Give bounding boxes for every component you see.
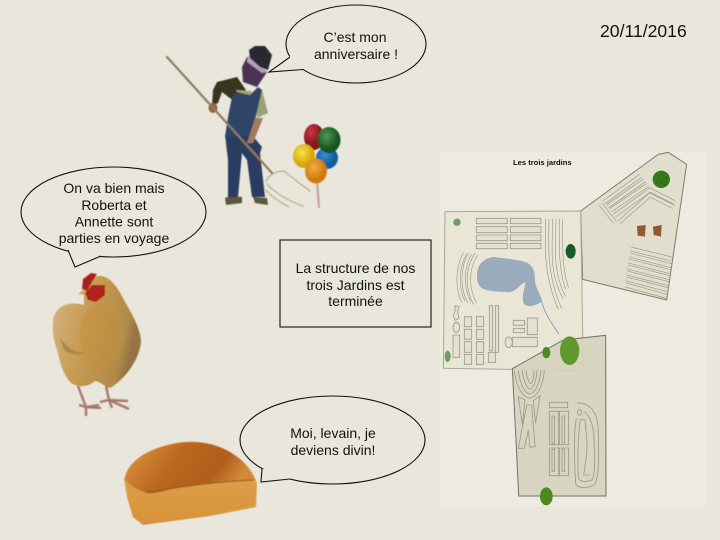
overalls bib [225,87,262,137]
bubble ellipse [240,396,425,484]
hen legs [78,386,129,416]
bubble text: C’est mon [323,29,387,45]
bubble tail fill [261,469,295,482]
orange balloon [305,158,327,184]
hand [208,103,218,113]
angled beds [601,176,674,222]
curved beds [459,219,567,309]
fork handle [167,57,272,173]
light sleeve [255,90,268,118]
bubble tail outline [269,57,303,72]
small trees [445,219,576,362]
hen comb [82,273,97,291]
rectangular beds [549,402,569,476]
date: 20/11/2016 [600,21,687,41]
hen beak [78,289,85,295]
garden panel north-east [581,152,687,300]
forearm [247,118,263,143]
green balloon [318,127,340,153]
garden plan [439,151,706,507]
hen breast [80,303,124,367]
balloons [293,124,340,208]
speech bubble: bread [240,396,425,484]
bubble text: parties en voyage [59,230,169,246]
box text: trois Jardins est [306,277,405,293]
trousers [225,135,265,197]
tree with red fruit [653,171,670,188]
bubble tail fill [269,56,312,72]
hen wing [60,338,86,354]
bubble tail fill [68,245,101,267]
bubble text: Annette sont [75,214,153,230]
yellow balloon [293,144,315,168]
bubble text: On va bien mais [63,180,165,196]
box frame [280,240,431,327]
bubble text: deviens divin! [291,442,375,458]
rectangular beds [453,218,541,364]
speech bubble: farmer [269,5,426,83]
bubble ellipse [21,167,206,257]
panel shape [581,152,687,300]
plan background [439,151,706,507]
box text: terminée [328,293,383,309]
bubble text: anniversaire ! [314,46,398,62]
panel shape [512,335,606,496]
panel shape [443,211,583,371]
hat [249,46,272,70]
balloon string [317,180,319,208]
garden panel main [443,211,583,371]
garden panel south [512,335,606,505]
dark shirt and arm [212,77,246,106]
text box: structure [280,240,431,327]
plan title: Les trois jardins [513,158,572,167]
farmer with pitchfork [167,46,310,207]
parallel beds [626,249,672,296]
bubble text: Roberta et [81,197,147,213]
hat band [247,55,268,73]
head [242,57,267,87]
hen body [53,276,141,388]
spiral beds [574,403,599,488]
bubble text: Moi, levain, je [290,425,376,441]
boots [225,196,268,205]
crust seam [147,480,254,492]
red balloon [304,124,324,150]
pond [477,257,542,306]
pitchfork [167,57,310,207]
fork tines [266,171,310,207]
loaf crust [125,442,255,493]
box text: La structure de nos [296,260,415,276]
bread loaf [124,442,257,525]
speech bubble: hen [21,167,206,267]
blue balloon [316,147,338,169]
collar [236,90,252,98]
fan beds [514,370,544,448]
stream [542,302,559,334]
bubble tail outline [261,469,290,482]
hen [53,273,141,416]
bubble tail outline [68,250,101,267]
loaf base [124,442,257,525]
hen wattle [85,285,105,302]
shrubs [540,336,579,505]
brown benches [637,225,662,237]
bubble ellipse [286,5,426,83]
